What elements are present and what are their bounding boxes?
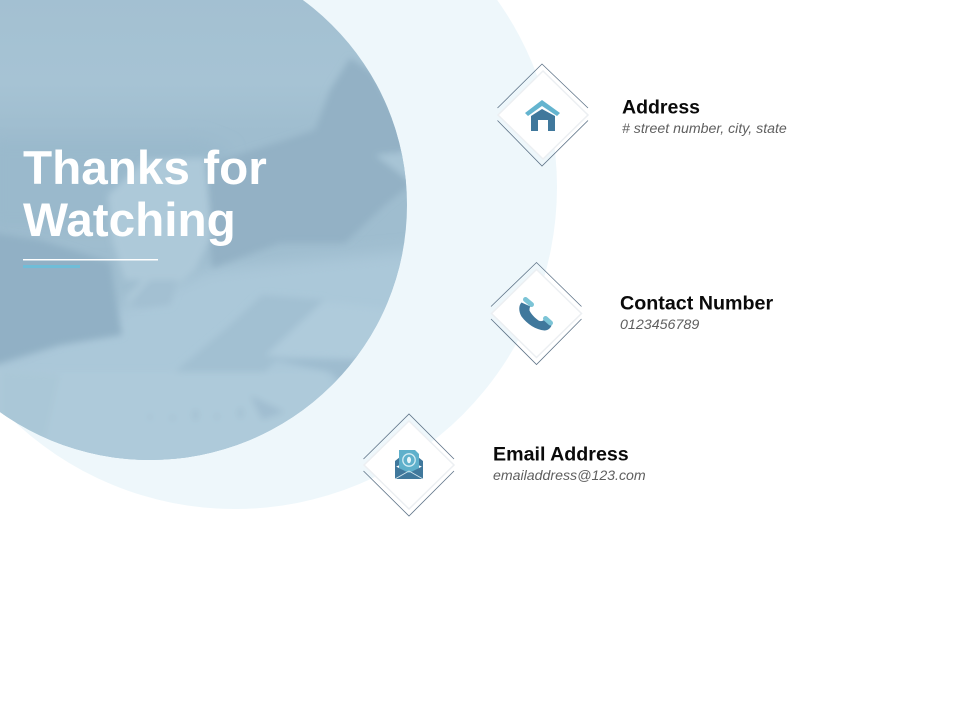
address text: # street number, city, state xyxy=(622,120,787,136)
diamond: email address xyxy=(364,414,454,516)
hands xyxy=(108,158,212,288)
icon: envelope xyxy=(395,450,423,479)
contact number text xyxy=(620,292,773,333)
diamond: contact number xyxy=(491,262,582,364)
background light circle xyxy=(0,0,557,509)
contact number text: Contact Number xyxy=(620,292,773,314)
icon: house xyxy=(525,100,560,131)
right sleeve xyxy=(205,58,410,268)
left sleeve xyxy=(0,232,122,366)
address text xyxy=(622,96,787,136)
icon: phone xyxy=(519,300,552,330)
diamond: address xyxy=(498,64,588,166)
foreground paper xyxy=(52,418,292,460)
keyboard xyxy=(190,300,312,367)
contact number text: 0123456789 xyxy=(620,317,699,333)
title: Thanks for xyxy=(23,142,267,195)
email address text xyxy=(493,444,646,483)
title underline xyxy=(23,259,158,268)
text: Watching xyxy=(23,194,236,247)
paper xyxy=(272,320,306,355)
address text: Address xyxy=(622,96,700,118)
email address text: Email Address xyxy=(493,444,629,466)
photo circle: handshake xyxy=(0,0,420,470)
email address text: emailaddress@123.com xyxy=(493,467,646,483)
